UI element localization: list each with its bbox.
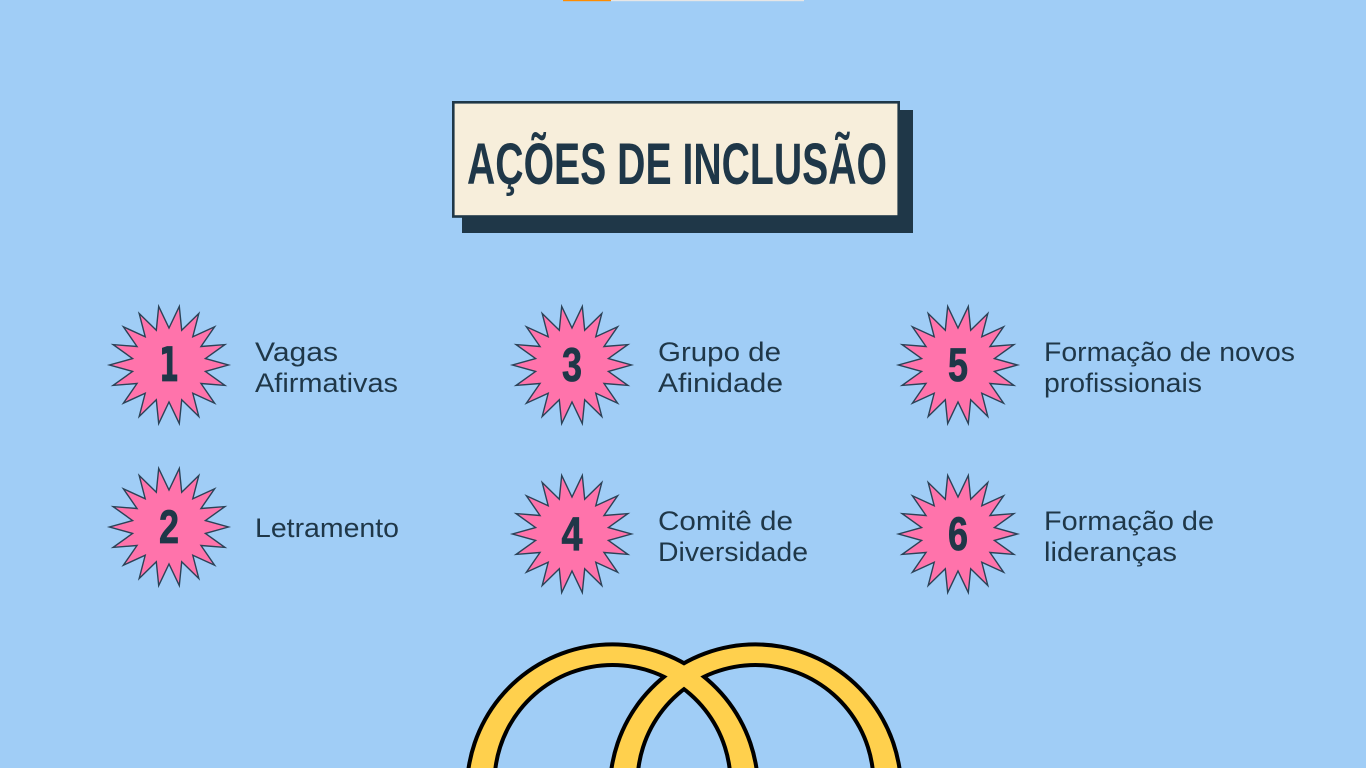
item 4: comite de diversidade: Diversidade bbox=[658, 537, 808, 567]
item 5: formacao de novos profissionais: Formação de novos bbox=[1044, 337, 1295, 367]
item 2: letramento: Letramento bbox=[255, 513, 399, 543]
title box bbox=[453, 102, 913, 233]
item 2: letramento bbox=[110, 468, 399, 586]
item 4: comite de diversidade: 4 bbox=[562, 507, 582, 560]
item 1: vagas afirmativas: Afirmativas bbox=[255, 368, 398, 398]
top progress bar bbox=[563, 0, 804, 1]
title: AÇÕES DE INCLUSÃO bbox=[467, 132, 887, 197]
item 6: formacao de liderancas: lideranças bbox=[1044, 537, 1177, 567]
item 1: vagas afirmativas: Vagas bbox=[255, 337, 338, 367]
item 5: formacao de novos profissionais: 5 bbox=[948, 338, 968, 391]
item 3: grupo de afinidade bbox=[512, 306, 783, 424]
item 4: comite de diversidade bbox=[512, 475, 808, 593]
item 6: formacao de liderancas bbox=[898, 475, 1214, 593]
item 1: vagas afirmativas: 1 bbox=[159, 338, 179, 393]
item 5: formacao de novos profissionais: profissionais bbox=[1044, 368, 1202, 398]
item 1: vagas afirmativas bbox=[110, 306, 398, 424]
item 2: letramento: 2 bbox=[159, 500, 179, 553]
item 4: comite de diversidade: Comitê de bbox=[658, 506, 793, 536]
item 3: grupo de afinidade: 3 bbox=[562, 338, 582, 391]
item 6: formacao de liderancas: 6 bbox=[948, 507, 968, 560]
item 5: formacao de novos profissionais bbox=[898, 306, 1295, 424]
interlocked yellow rings bbox=[467, 642, 901, 768]
item 6: formacao de liderancas: Formação de bbox=[1044, 506, 1214, 536]
item 3: grupo de afinidade: Afinidade bbox=[658, 368, 783, 398]
item 3: grupo de afinidade: Grupo de bbox=[658, 337, 781, 367]
